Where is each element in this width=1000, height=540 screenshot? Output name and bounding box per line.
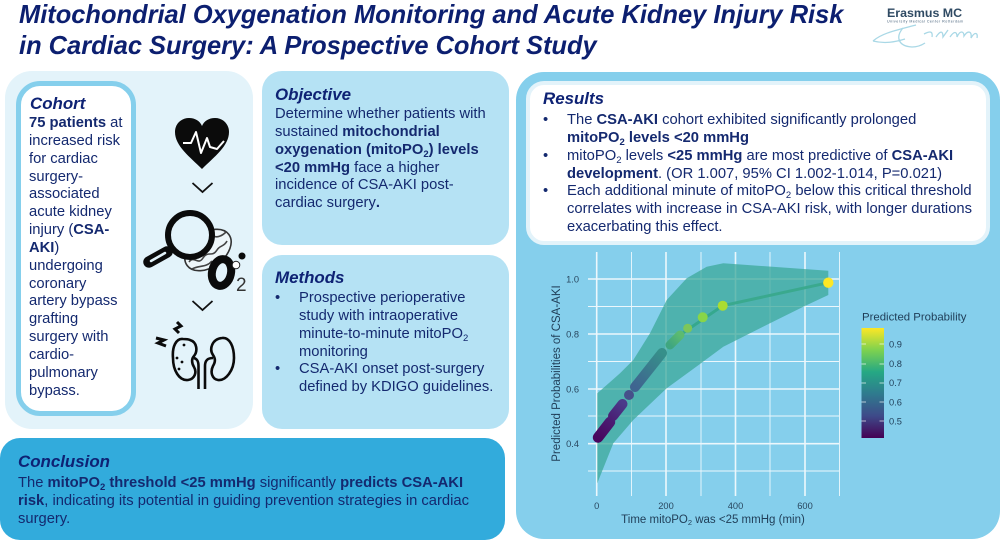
axis labels: 0.8 xyxy=(566,330,579,340)
text: cohort description: artery bypass xyxy=(29,293,118,309)
text: cohort description: 75 patients at xyxy=(29,115,122,131)
text: objective: Determine whether patients with xyxy=(275,106,486,122)
text: methods bullets: CSA-AKI onset post-surgery xyxy=(299,361,484,377)
text: cohort description: bypass. xyxy=(29,383,80,399)
panel: cohort text box xyxy=(16,81,136,416)
text: conclusion xyxy=(18,475,469,527)
heading: results: Results xyxy=(543,89,604,108)
legend: predicted probability: 0.6 xyxy=(889,398,902,408)
text: cohort description: surgery with xyxy=(29,329,109,345)
icon: heart with pulse xyxy=(175,118,229,169)
axis labels xyxy=(566,274,579,449)
title: Mitochondrial Oxygenation Monitoring and Acute Kidney Injury Risk xyxy=(19,1,843,29)
text: conclusion: The mitoPO2 threshold <25 mmHg significantly predicts CSA-AKI xyxy=(18,475,463,493)
text: objective: cardiac surgery. xyxy=(275,195,380,211)
text: results bullets: development. (OR 1.007, 95% CI 1.002-1.014, P=0.021) xyxy=(567,166,942,182)
text: methods bullets: monitoring xyxy=(299,344,368,360)
text: conclusion: surgery. xyxy=(18,511,70,527)
legend: predicted probability: 0.5 xyxy=(889,416,902,426)
text: cohort description: grafting xyxy=(29,311,78,327)
text: methods bullets: study with intraoperative xyxy=(299,308,458,324)
text: objective xyxy=(275,106,486,211)
text: objective: oxygenation (mitoPO2) levels xyxy=(275,142,479,160)
text: results bullets xyxy=(544,112,972,235)
text: cohort description: AKI) xyxy=(29,240,59,256)
text: methods bullets xyxy=(276,290,493,395)
panel: results xyxy=(516,72,1000,539)
predicted probability line and points xyxy=(598,278,834,438)
axis labels: 0.6 xyxy=(566,384,579,394)
chart: predicted probabilities of CSA-AKI: 200 xyxy=(658,501,674,511)
text: cohort description: acute kidney xyxy=(29,204,112,220)
heading: methods: Methods xyxy=(275,268,344,287)
text: results bullets: correlates with increase in CSA-AKI risk, with longer durations xyxy=(567,201,972,217)
legend: predicted probability: 0.9 xyxy=(889,340,902,350)
logo: Erasmus MC: University Medical Center Rotterdam xyxy=(887,20,963,24)
chart: predicted probabilities of CSA-AKI xyxy=(551,252,967,527)
text: results bullets: The CSA-AKI cohort exhibited significantly prolonged xyxy=(567,112,916,128)
chart: predicted probabilities of CSA-AKI: 600 xyxy=(797,501,813,511)
text: cohort description: coronary xyxy=(29,276,86,292)
title: in Cardiac Surgery: A Prospective Cohort Study xyxy=(19,32,597,60)
panel: conclusion xyxy=(0,438,505,540)
text: cohort description xyxy=(29,115,122,399)
icon: chevron down xyxy=(192,183,212,192)
text: methods bullets: defined by KDIGO guidelines. xyxy=(299,379,493,395)
panel: objective xyxy=(262,71,509,245)
text: methods bullets: Prospective perioperative xyxy=(299,290,465,306)
text: results bullets: mitoPO2 levels <25 mmHg are most predictive of CSA-AKI xyxy=(567,148,953,166)
heading: cohort: Cohort xyxy=(30,94,85,113)
axis labels: 0.4 xyxy=(566,439,579,449)
panel: results text box xyxy=(526,81,990,245)
chart: predicted probabilities of CSA-AKI: Time mitoPO xyxy=(621,514,688,526)
text: cohort description: for cardiac xyxy=(29,151,98,167)
text: cohort description: cardio- xyxy=(29,347,74,363)
chart: predicted probabilities of CSA-AKI: Predicted Probabilities of CSA-AKI xyxy=(551,285,563,462)
text: methods bullets: minute-to-minute mitoPO2 xyxy=(299,326,468,344)
text: results bullets: exacerbating this effect. xyxy=(567,219,723,235)
text: conclusion: risk, indicating its potential in guiding prevention strategies in cardiac xyxy=(18,493,469,509)
chart: predicted probabilities of CSA-AKI: 2 xyxy=(688,518,692,527)
icon: injured kidneys xyxy=(156,322,234,389)
panel: methods xyxy=(262,255,509,429)
text: cohort description: injury (CSA- xyxy=(29,222,109,238)
confidence ribbon xyxy=(597,263,828,483)
text: cohort description: increased risk xyxy=(29,133,120,149)
logo: Erasmus MC: Erasmus MC xyxy=(887,6,962,20)
text: cohort description: associated xyxy=(29,186,100,202)
panel: cohort and icons xyxy=(5,71,253,429)
icon: chevron down xyxy=(192,301,212,310)
icons: heart, mitochondrion oxygen, kidneys xyxy=(143,118,247,389)
chart: predicted probabilities of CSA-AKI: was <25 mmHg (min) xyxy=(692,514,805,526)
legend: predicted probability xyxy=(862,312,967,438)
legend: predicted probability: 0.7 xyxy=(889,378,902,388)
legend: predicted probability: Predicted Probability xyxy=(862,312,967,324)
chart: predicted probabilities of CSA-AKI: 0 xyxy=(594,501,599,511)
heading: objective: Objective xyxy=(275,85,351,104)
heading: conclusion: Conclusion xyxy=(18,452,110,471)
text: objective: incidence of CSA-AKI post- xyxy=(275,177,454,193)
text: cohort description: undergoing xyxy=(29,258,103,274)
axis labels: 1.0 xyxy=(566,274,579,284)
title xyxy=(19,1,844,60)
text: cohort description: pulmonary xyxy=(29,365,98,381)
text: objective: sustained mitochondrial xyxy=(275,124,440,140)
legend: predicted probability: 0.8 xyxy=(889,359,902,369)
text: objective: <20 mmHg face a higher xyxy=(275,160,439,176)
icon: magnifier with mitochondrion and O2: 2 xyxy=(236,275,247,296)
icon: magnifier with mitochondrion and O2 xyxy=(149,213,247,296)
logo: Erasmus MC xyxy=(872,6,978,48)
text: results bullets: Each additional minute of mitoPO2 below this critical threshold xyxy=(567,183,972,201)
text: cohort description: surgery- xyxy=(29,169,83,185)
text: results bullets: mitoPO2 levels <20 mmHg xyxy=(567,130,749,148)
chart: predicted probabilities of CSA-AKI: 400 xyxy=(728,501,743,511)
